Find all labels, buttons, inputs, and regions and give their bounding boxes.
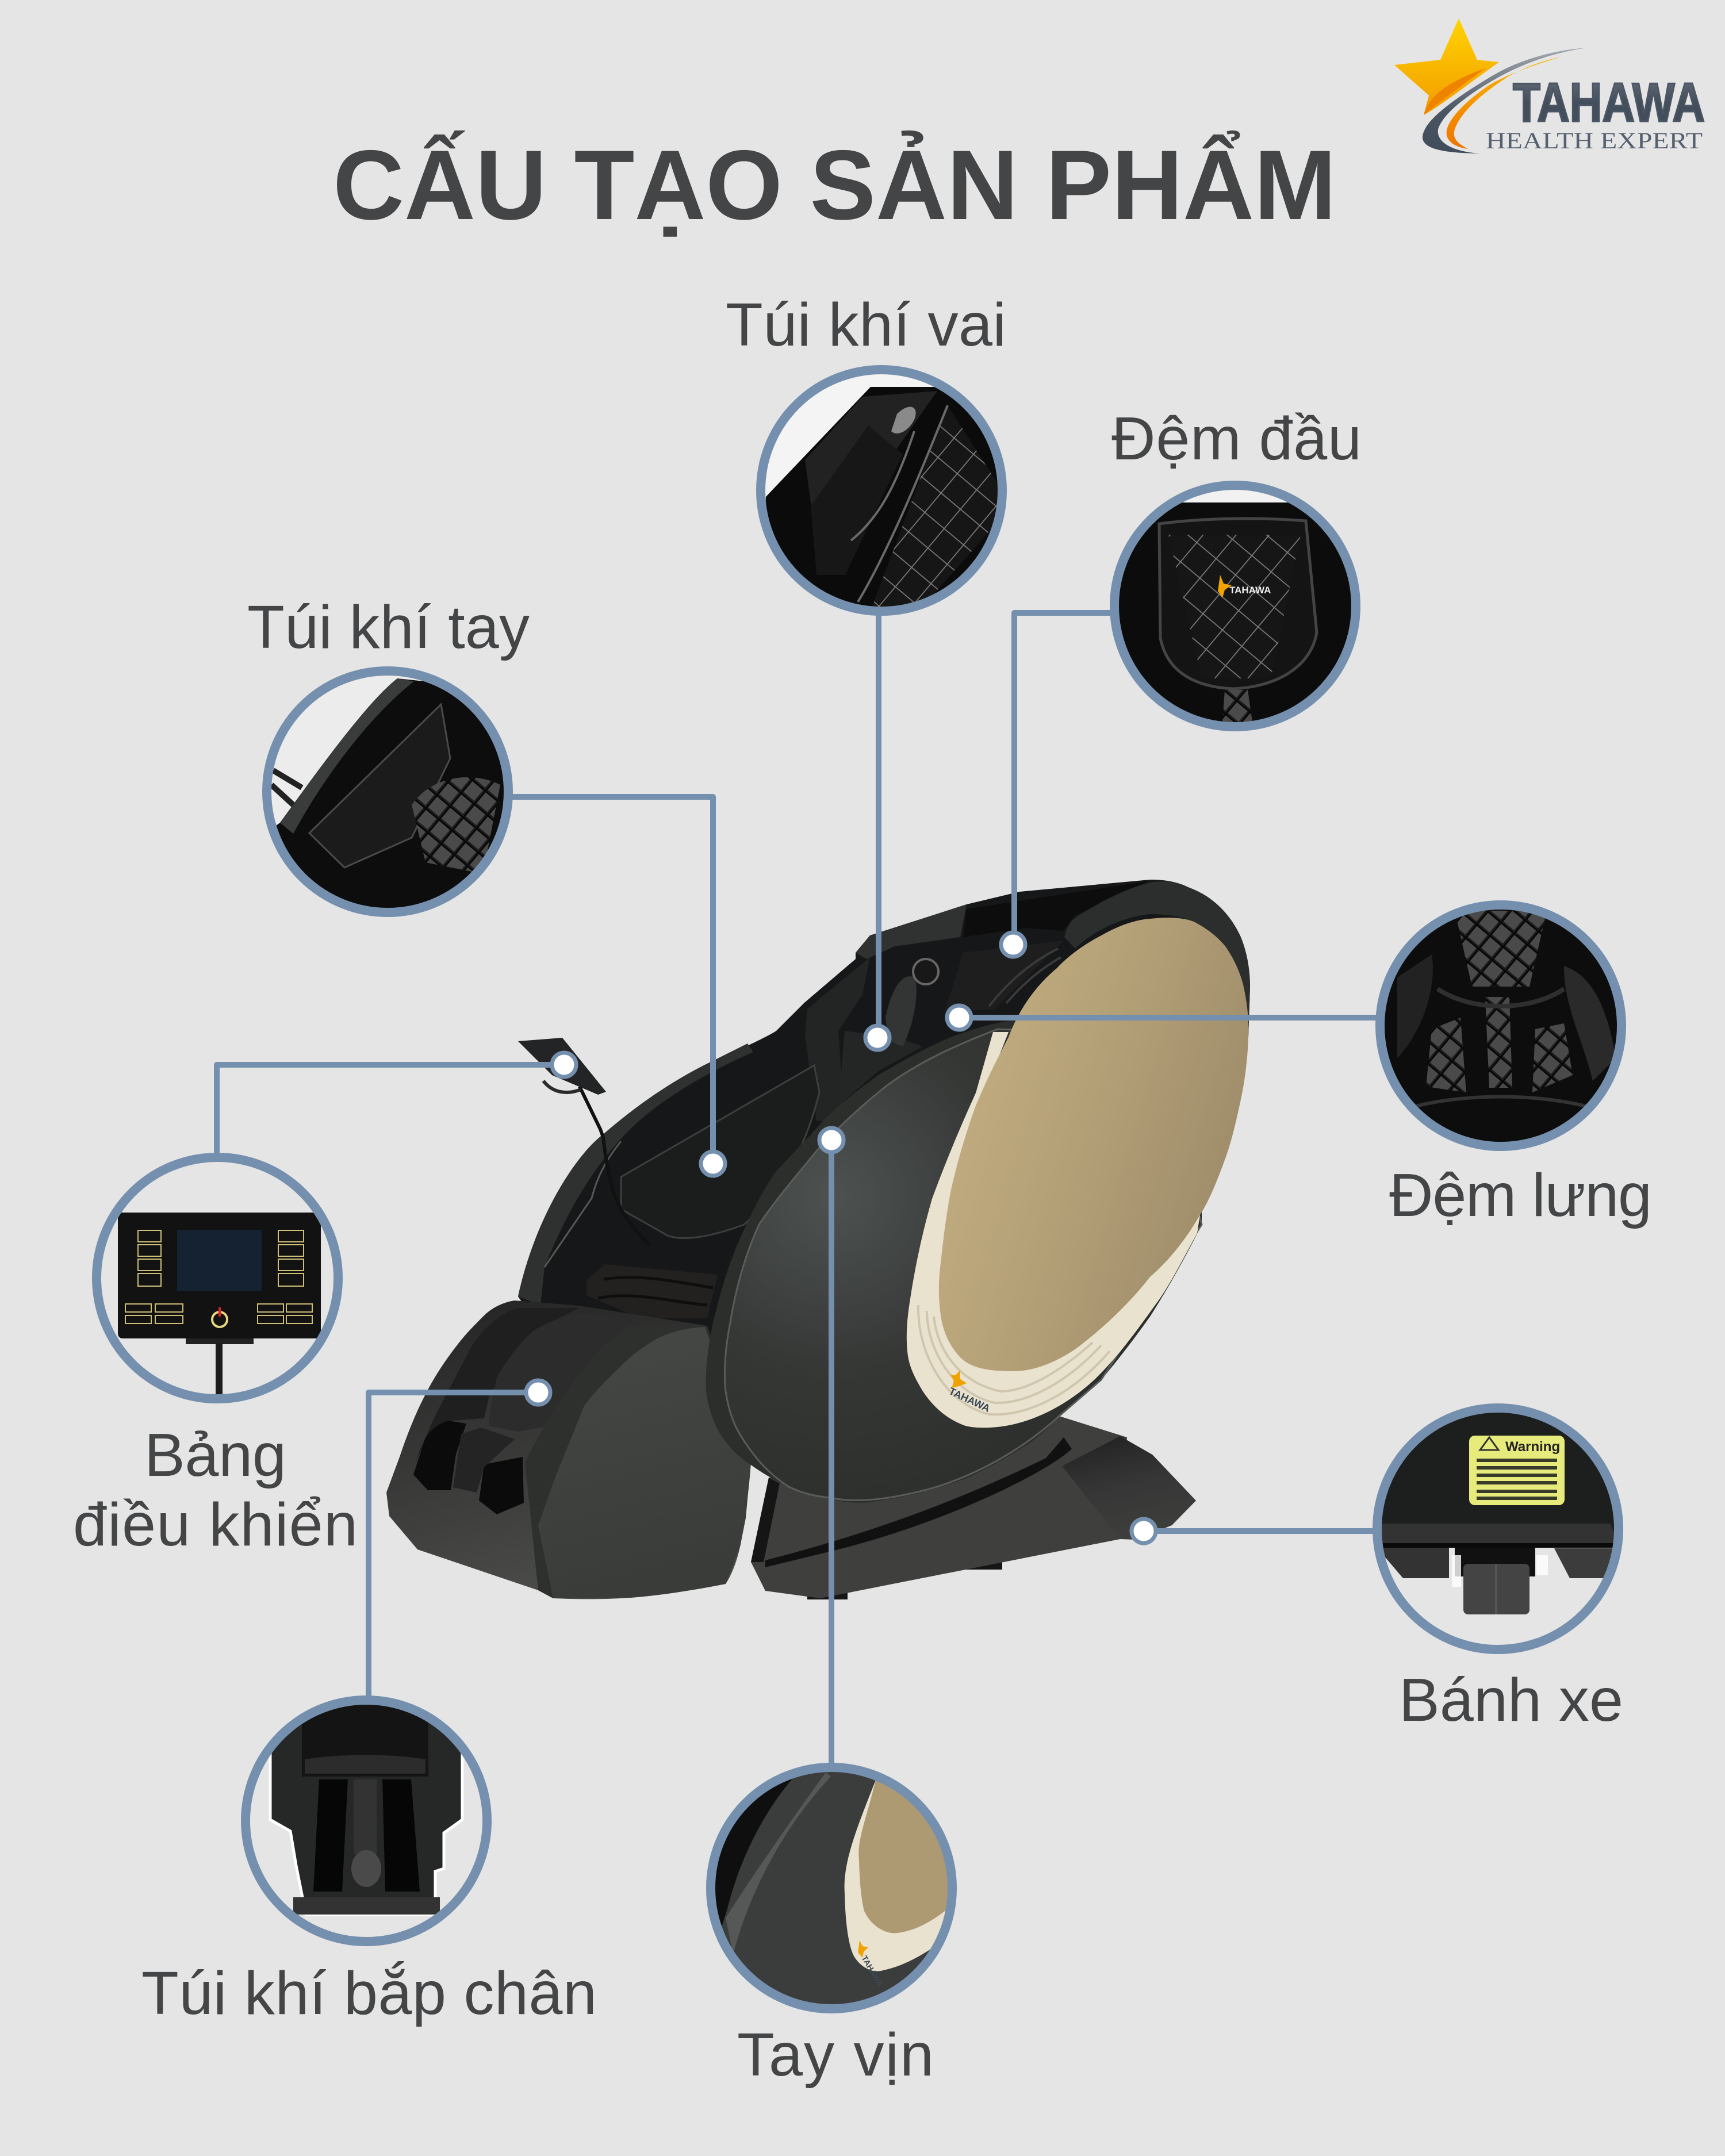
chair: remote control [518,1038,606,1095]
label: Đệm đầu: Đệm đầu [1111,405,1362,473]
callout: wheel [1377,1406,1623,1734]
chair: seat cushion [586,1264,718,1318]
chair: side panel [538,1327,751,1598]
dot: calf airbag [526,1380,550,1405]
chair: remote cable [580,1087,650,1246]
chair: base [751,1416,1196,1599]
callout: arm airbag [247,593,530,914]
label: Bảng: Bảng [144,1421,286,1489]
dot: wheel [1132,1519,1156,1543]
chair: shoulder pod [805,957,870,1121]
photo: head cushion: TAHAWA [1229,585,1271,596]
line: calf airbag [369,1392,538,1699]
remote body [518,1038,606,1095]
callout: calf airbag [141,1700,597,2027]
chair: gold panel [939,918,1248,1371]
dot: armrest [819,1128,844,1152]
line: shoulder airbag [876,615,881,1038]
connector dots [526,933,1156,1543]
icon: grey swoosh [1423,48,1587,154]
callout: control panel [73,1157,358,1559]
photo: head cushion [1119,490,1351,722]
icon: orange swoosh [1447,57,1561,149]
chair: head cushion [945,941,1063,1012]
icon: star shade [1424,68,1486,115]
photo: armrest: TAHAWA [860,1954,885,1988]
label: Túi khí vai: Túi khí vai [726,291,1006,359]
chair: headrest hood [963,881,1150,937]
chair: back rim stitch [545,1141,621,1267]
chair: left foot well [413,1421,466,1490]
chair: cream crescent [907,1032,1200,1428]
massage chair illustration [386,880,1250,1599]
photo: back cushion [1380,903,1621,1150]
photo: arm airbag [271,678,504,908]
chair: side logo [942,1367,999,1414]
base end wedge [1062,1436,1196,1540]
photo: shoulder airbag [765,374,998,607]
label: Túi khí bắp chân: Túi khí bắp chân [141,1959,597,2027]
label: Bánh xe: Bánh xe [1399,1666,1623,1734]
line: back cushion [959,1015,1380,1021]
dot: arm airbag [701,1152,725,1176]
title: CẤU TẠO SẢN PHẨM [333,130,1336,240]
chair: shoulder fold [885,976,917,1046]
dot: shoulder airbag [865,1026,890,1050]
remote strap [543,1081,581,1092]
ring [761,370,1002,611]
callout: armrest [707,1765,954,2089]
chair: crescent ridges [918,1305,1110,1414]
chair: back shell [518,880,1250,1380]
line: head cushion [1014,613,1118,945]
chair: calf ridge two [489,1313,646,1432]
ring [267,671,508,912]
ring [1114,485,1356,727]
callout: head cushion [1110,405,1363,730]
chair: seat cushion folds [598,1278,713,1305]
chair: calf ridge one [415,1308,579,1462]
label: Tay vịn: Tay vịn [737,2021,934,2089]
icon: star [1394,18,1499,115]
base left edge [751,1478,780,1562]
photo: armrest [715,1772,948,2004]
icon: small star [946,1367,971,1392]
chair: right foot well [479,1457,524,1514]
logo [1394,18,1705,154]
line: control panel [217,1065,564,1154]
chair: roller ring [913,959,938,984]
photo: calf airbag [270,1702,462,1915]
chair: side panel rim [525,1326,751,1598]
label: điều khiển: điều khiển [73,1491,358,1559]
chair: arm shell [706,1018,1202,1503]
label: Túi khí tay: Túi khí tay [247,593,530,661]
base body [751,1416,1127,1598]
side logo text: TAHAWA [947,1385,992,1414]
ring [1377,1408,1619,1649]
chair: headrest left pad [856,904,967,959]
dot: control panel [552,1053,576,1077]
line: arm airbag [512,797,713,1164]
logo tagline: HEALTH EXPERT [1486,128,1703,154]
base top plate [1067,1432,1120,1463]
photo: wheel [1377,1406,1621,1614]
connector lines [217,613,1380,1765]
line: armrest [829,1140,834,1765]
line: wheel [1144,1528,1375,1534]
label: Đệm lưng: Đệm lưng [1389,1161,1652,1229]
chair: shoulder airbag panel [838,1031,923,1106]
chair: arm shell inner panel [724,1029,1202,1501]
dot: head cushion [1001,933,1025,957]
base feet [807,1559,1002,1599]
base black strip [765,1437,1072,1567]
chair: leg rest [386,1300,751,1599]
photo: wheel: Warning [1505,1439,1560,1455]
callout: back cushion [1380,903,1652,1229]
chair: head rim [1064,881,1250,1037]
chair: back rim [518,1044,753,1305]
ring [1380,905,1621,1146]
chair: head cushion folds [989,949,1061,1006]
ring [246,1700,487,1942]
photo: control panel [118,1213,321,1401]
chair: arm airbag flap [621,1065,819,1238]
ring [97,1157,338,1399]
callout: shoulder airbag [726,291,1012,621]
dot: back cushion [947,1006,971,1030]
ring [711,1767,952,2009]
chair: centre pad [453,1428,515,1493]
